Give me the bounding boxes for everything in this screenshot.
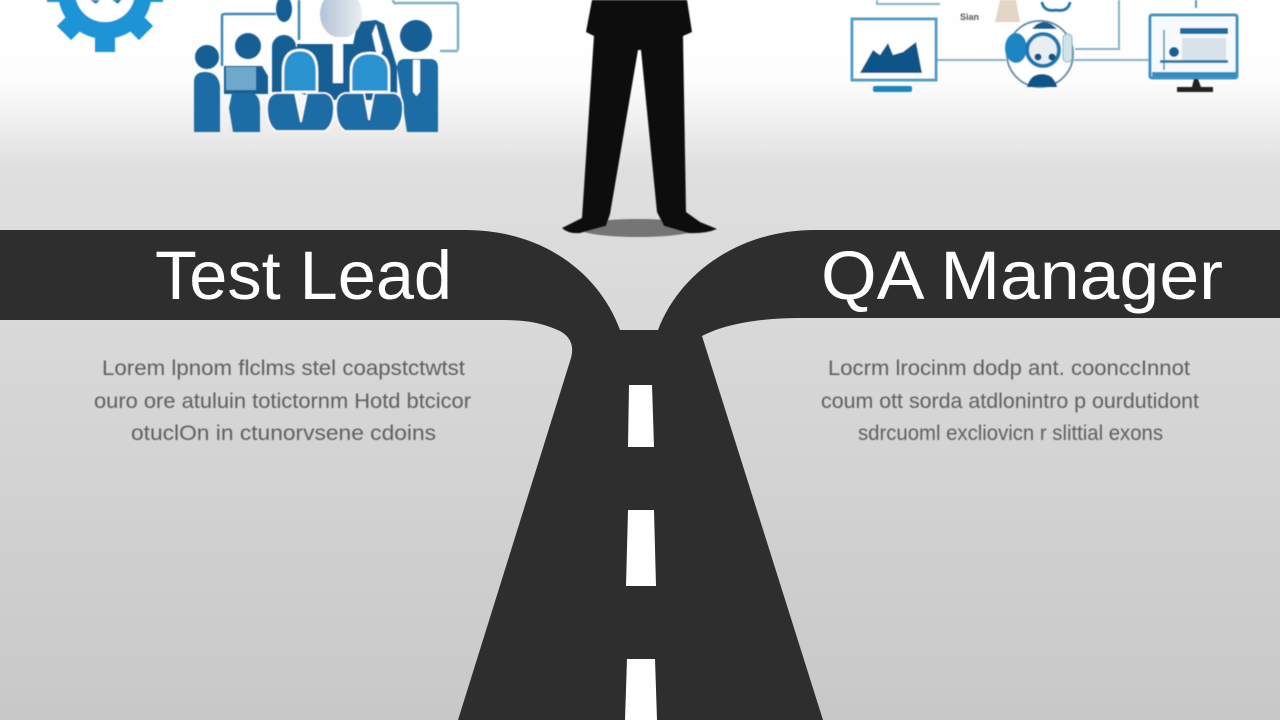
crossroads road [0, 230, 1280, 720]
right person [397, 20, 438, 132]
road dash 3 [625, 659, 657, 720]
front-left person [267, 50, 334, 131]
icon: gear [47, 0, 163, 52]
blue head fragment [1042, 2, 1070, 10]
text block: left description: ouro ore atuluin totictornm Hotd btcicor [94, 389, 471, 413]
back figure with white head [297, 0, 397, 100]
front-right person [336, 53, 403, 131]
text block: left description: otuclOn in ctunorvsene cdoins [131, 421, 436, 445]
text block: right description [821, 356, 1199, 445]
figure: man standing at the crossroads [562, 0, 717, 237]
road dash 2 [626, 510, 656, 586]
text block: left description: Lorem lpnom flclms stel coapstctwtst [102, 356, 465, 380]
text block: right description: Locrm lrocinm dodp ant. coonccInnot [828, 356, 1190, 380]
connector lines [877, 0, 1196, 60]
heading: QA Manager: QA Manager [821, 237, 1223, 314]
person fragment [995, 0, 1020, 22]
illustration: connected monitors [852, 0, 1237, 92]
shadow [578, 219, 698, 237]
far-left person [194, 45, 220, 132]
small caption: Sian [960, 12, 979, 22]
illustration: team of people [194, 0, 458, 132]
person with tablet [224, 33, 268, 132]
heading: Test Lead: Test Lead [155, 237, 452, 314]
road dash 1 [628, 385, 654, 447]
circular avatar [1005, 21, 1073, 87]
back-left person [272, 0, 297, 92]
text block: right description: sdrcuoml excliovicn r slittial exons [858, 421, 1163, 445]
monitor with chart [852, 19, 936, 92]
text block: right description: coum ott sorda atdlonintro p ourdutidont [821, 389, 1199, 413]
text block: left description [94, 356, 471, 445]
jacket and trousers [562, 0, 717, 233]
monitor with dashboard [1150, 15, 1237, 92]
connector lines [222, 0, 458, 66]
